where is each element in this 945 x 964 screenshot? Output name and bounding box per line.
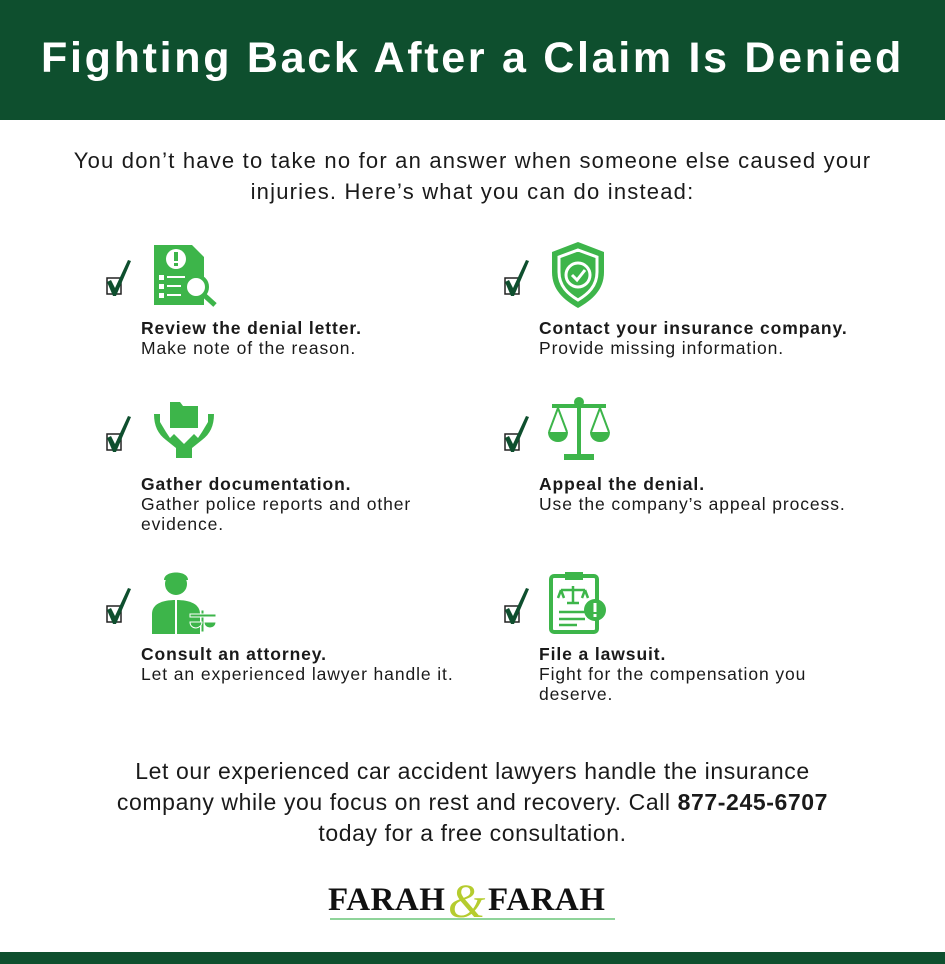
bottom bar: [0, 952, 945, 964]
item: contact insurance: Provide missing information.: [539, 338, 784, 358]
checkmark 2: [504, 260, 529, 296]
header banner: Fighting Back After a Claim Is Denied: [41, 34, 904, 82]
item: review denial letter: [141, 318, 362, 358]
icon: attorney: [152, 572, 216, 634]
logo: &: [448, 875, 485, 928]
logo: FARAH: [328, 882, 445, 918]
icon: shield: [552, 242, 604, 308]
item: consult attorney: [141, 644, 454, 684]
item: review denial letter: Review the denial letter.: [141, 318, 362, 338]
item: appeal: [539, 474, 846, 514]
footer call to action: today for a free consultation.: [318, 820, 627, 846]
checkmark 6: [504, 588, 529, 624]
footer call to action: Let our experienced car accident lawyers handle the insurance: [135, 758, 810, 784]
item: consult attorney: Consult an attorney.: [141, 644, 327, 664]
item: gather documentation: Gather police reports and other: [141, 494, 411, 514]
icon: hands with folder: [154, 402, 214, 458]
icon: document magnifier: [154, 245, 217, 307]
icon: scales: [548, 397, 610, 460]
item: appeal: Appeal the denial.: [539, 474, 705, 494]
header banner: [0, 0, 945, 120]
checkmark 4: [504, 416, 529, 452]
logo: [328, 875, 615, 928]
item: file lawsuit: Fight for the compensation you: [539, 664, 806, 684]
item: file lawsuit: deserve.: [539, 684, 613, 704]
item: contact insurance: [539, 318, 848, 358]
intro text: [74, 148, 871, 204]
item: consult attorney: Let an experienced lawyer handle it.: [141, 664, 454, 684]
item: gather documentation: [141, 474, 411, 534]
item: file lawsuit: File a lawsuit.: [539, 644, 666, 664]
checkmark 1: [106, 260, 131, 296]
footer call to action: [117, 758, 828, 846]
item: contact insurance: Contact your insurance company.: [539, 318, 848, 338]
logo: FARAH: [488, 882, 605, 918]
item: file lawsuit: [539, 644, 806, 704]
item: gather documentation: evidence.: [141, 514, 224, 534]
icon: clipboard lawsuit: [549, 572, 606, 634]
item: gather documentation: Gather documentation.: [141, 474, 351, 494]
footer call to action: company while you focus on rest and recovery. Call 877-245-6707: [117, 789, 828, 815]
checkmark 3: [106, 416, 131, 452]
item: review denial letter: Make note of the reason.: [141, 338, 356, 358]
intro text: You don’t have to take no for an answer when someone else caused your: [74, 148, 871, 173]
checkmark 5: [106, 588, 131, 624]
item: appeal: Use the company’s appeal process.: [539, 494, 846, 514]
intro text: injuries. Here’s what you can do instead:: [251, 179, 694, 204]
